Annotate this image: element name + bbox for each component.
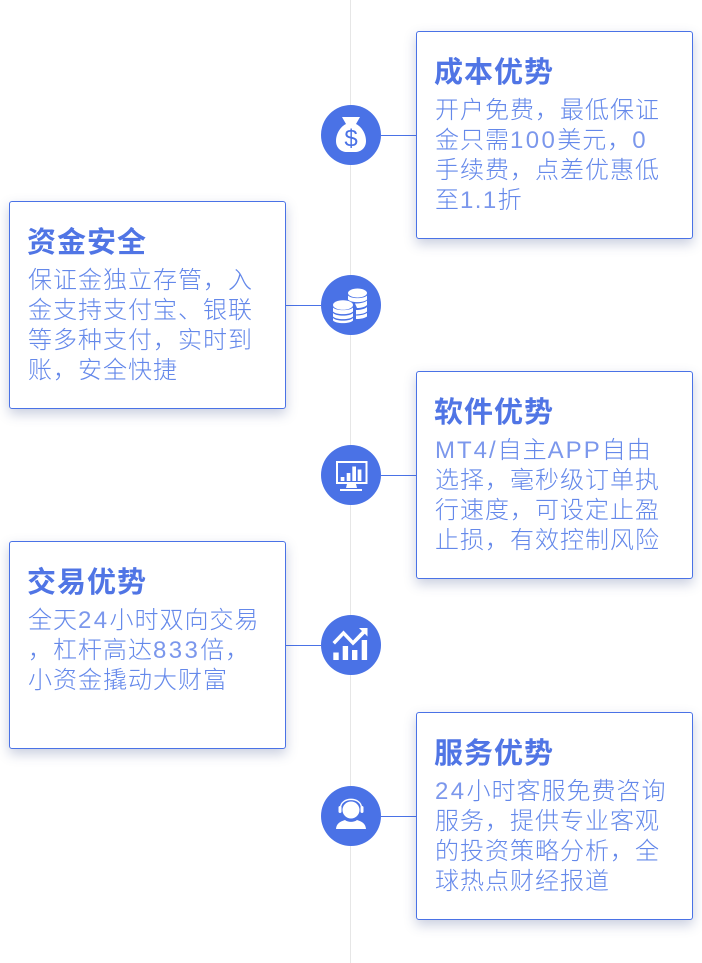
text: software advantage: MT4/自主APP自由 xyxy=(435,437,652,464)
icon: growth chart xyxy=(321,615,381,675)
text: trading advantage: 全天24小时双向交易 xyxy=(28,607,260,634)
connector: funds xyxy=(286,305,321,306)
text: cost advantage: 手续费，点差优惠低 xyxy=(435,157,660,184)
icon: customer service headset xyxy=(321,786,381,846)
heading: trading advantage: 交易优势 xyxy=(27,567,147,599)
text: funds safety: 等多种支付，实时到 xyxy=(28,327,253,354)
text: software advantage: 行速度，可设定止盈 xyxy=(435,497,660,524)
connector: cost xyxy=(381,135,416,136)
heading: software advantage: 软件优势 xyxy=(434,397,554,429)
panel: software advantage xyxy=(416,371,693,579)
panel: cost advantage xyxy=(416,31,693,239)
text: cost advantage xyxy=(435,97,660,214)
connector: software xyxy=(381,475,416,476)
icon: money bag xyxy=(321,105,381,165)
panel: service advantage xyxy=(416,712,693,920)
text: service advantage xyxy=(435,778,666,895)
text: trading advantage: ，杠杆高达833倍， xyxy=(28,637,250,664)
icon: monitor chart xyxy=(321,445,381,505)
text: software advantage: 选择，毫秒级订单执 xyxy=(435,467,660,494)
text: cost advantage: 开户免费，最低保证 xyxy=(435,97,660,124)
text: service advantage: 服务，提供专业客观 xyxy=(435,808,660,835)
text: trading advantage xyxy=(28,607,260,694)
text: cost advantage: 至1.1折 xyxy=(435,187,523,214)
connector: trading xyxy=(286,645,321,646)
text: service advantage: 24小时客服免费咨询 xyxy=(435,778,666,805)
icon: money bag: $ xyxy=(344,126,358,152)
text: software advantage xyxy=(435,437,660,554)
text: funds safety xyxy=(28,267,253,384)
icon: coin stacks xyxy=(321,275,381,335)
text: funds safety: 账，安全快捷 xyxy=(28,357,178,384)
text: cost advantage: 金只需100美元，0 xyxy=(435,127,648,154)
text: service advantage: 的投资策略分析，全 xyxy=(435,838,660,865)
heading: funds safety: 资金安全 xyxy=(27,227,147,259)
text: service advantage: 球热点财经报道 xyxy=(435,868,610,895)
text: funds safety: 金支持支付宝、银联 xyxy=(28,297,253,324)
text: funds safety: 保证金独立存管，入 xyxy=(28,267,253,294)
panel: funds safety xyxy=(9,201,286,409)
connector: service xyxy=(381,816,416,817)
text: software advantage: 止损，有效控制风险 xyxy=(435,527,660,554)
text: trading advantage: 小资金撬动大财富 xyxy=(28,667,228,694)
heading: service advantage: 服务优势 xyxy=(434,738,554,770)
panel: trading advantage xyxy=(9,541,286,749)
heading: cost advantage: 成本优势 xyxy=(434,57,554,89)
